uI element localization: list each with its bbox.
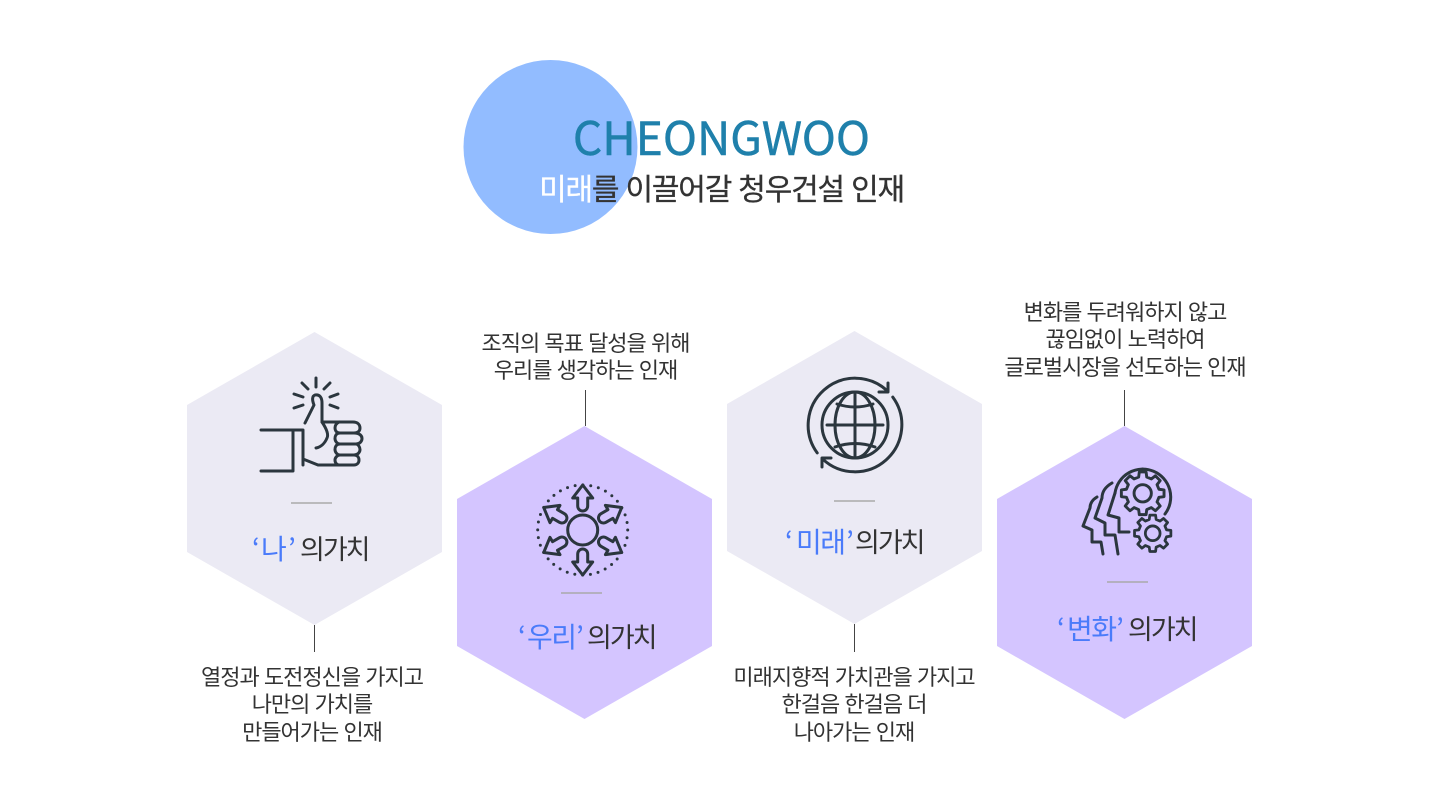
heading: ’ [288,528,296,568]
heading: ‘ [785,521,793,561]
description: 끊임없이 노력하여 [1045,322,1205,354]
heading [518,616,656,656]
heading [1057,608,1197,648]
description: 나아가는 인재 [794,715,914,747]
heading: 변화 [1067,608,1116,648]
description: 글로벌시장을 선도하는 인재 [1004,350,1246,382]
divider [1107,581,1148,583]
panel: 변화의 가치 [997,295,1252,719]
panel: 나의 가치 [187,332,442,747]
description [201,660,424,747]
icon: globe with arrows [808,378,902,472]
hexagon [187,332,442,625]
heading [252,528,369,568]
heading: 의가치 [587,616,656,655]
subtitle: 미래를 이끌어갈 청우건설 인재 [539,165,904,209]
title block [464,60,904,234]
description: 우리를 생각하는 인재 [494,353,677,385]
heading: 나 [261,528,286,568]
title: CHEONGWOO: CHEONGWOO [573,103,870,169]
decorative circle [464,60,638,234]
heading: 의가치 [1128,608,1197,647]
heading: ‘ [518,616,526,656]
heading: ’ [576,616,584,656]
description [733,660,975,747]
heading [785,521,924,561]
heading: ’ [1116,608,1124,648]
hexagon [457,426,712,719]
description: 조직의 목표 달성을 위해 [482,326,689,358]
icon: heads with gears [1083,469,1171,554]
panel: 우리의 가치 [457,326,712,719]
description: 미래지향적 가치관을 가지고 [733,660,975,692]
heading: 우리 [527,616,576,656]
icon: thumbs up [261,378,362,471]
description: 변화를 두려워하지 않고 [1024,295,1227,327]
divider [834,500,875,502]
description: 만들어가는 인재 [242,715,382,747]
description: 나만의 가치를 [252,687,373,719]
heading: 미래 [796,521,845,561]
panel: 미래의 가치 [727,331,982,747]
description: 한걸음 한걸음 더 [781,687,927,719]
heading: ’ [846,521,854,561]
connector [314,625,316,652]
icon: arrows radiating [538,485,628,575]
connector [584,390,586,426]
divider [291,502,332,504]
description [482,326,689,385]
description [1004,295,1246,382]
description: 열정과 도전정신을 가지고 [201,660,424,692]
hexagon [997,426,1252,719]
heading: 의가치 [300,528,369,567]
divider [561,592,602,594]
heading: ‘ [1057,608,1065,648]
hexagon [727,331,982,624]
connector [1124,390,1126,426]
connector [854,624,856,652]
heading: 의가치 [855,521,924,560]
heading: ‘ [252,528,260,568]
